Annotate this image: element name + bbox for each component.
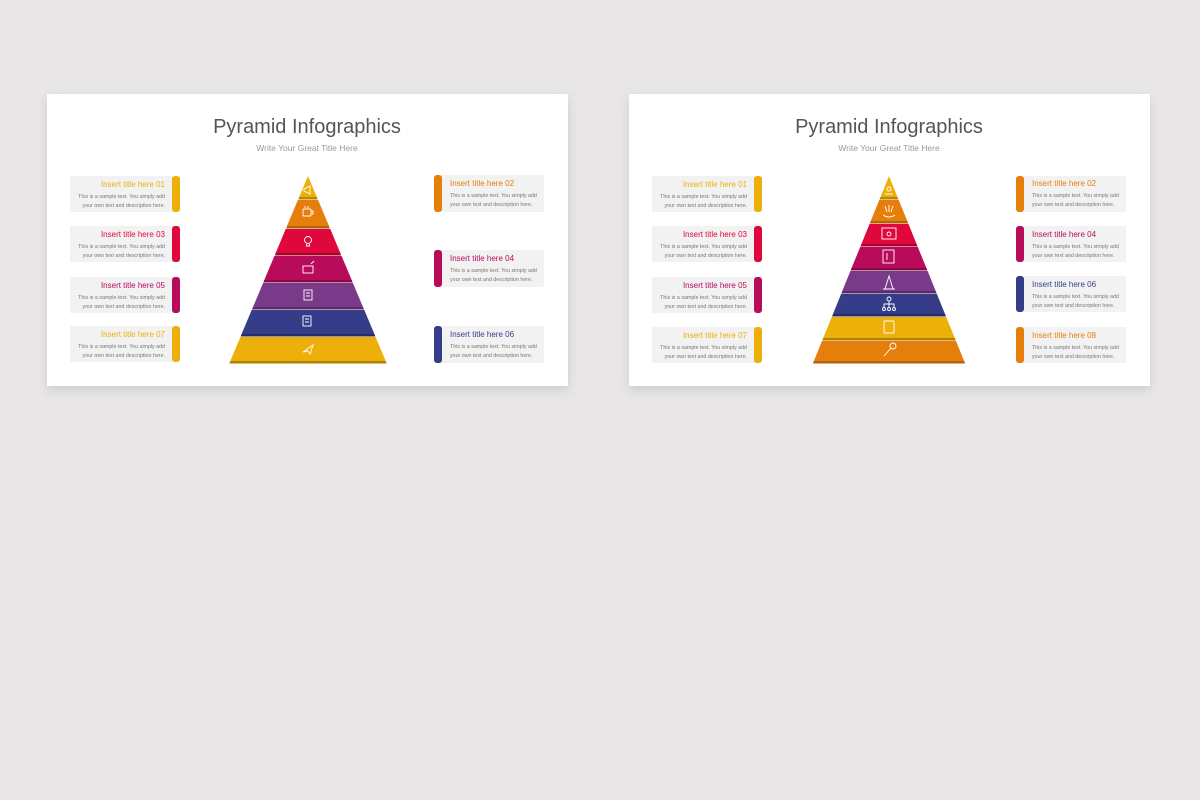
callout: 01: [70, 176, 180, 212]
callout: 05: Insert title here 05: [101, 281, 166, 290]
pyramid: 8 levels: [813, 176, 965, 364]
callout: 02: your own text and description here.: [450, 202, 532, 208]
callout: 03: your own text and description here.: [83, 253, 165, 259]
callout: 02: This is a sample text. You simply add: [1032, 193, 1119, 199]
callout: 01: This is a sample text. You simply add: [660, 194, 747, 200]
callout: 08: [1016, 327, 1126, 363]
callout: 04: [1016, 226, 1126, 262]
callout: 04: This is a sample text. You simply add: [450, 268, 537, 274]
callout: 07: your own text and description here.: [83, 353, 165, 359]
callout: 06: Insert title here 06: [1032, 280, 1097, 289]
callout: 06: Insert title here 06: [450, 330, 515, 339]
callout: 05: This is a sample text. You simply add: [78, 295, 165, 301]
callout: 01: [652, 176, 762, 212]
callout: 08: Insert title here 08: [1032, 331, 1097, 340]
callout: 05: your own text and description here.: [83, 304, 165, 310]
callout: 07: your own text and description here.: [665, 354, 747, 360]
callout: 05: [70, 277, 180, 313]
pyramid: 7 levels: [229, 176, 387, 364]
callout: 07: This is a sample text. You simply add: [660, 345, 747, 351]
callout: 03: [652, 226, 762, 262]
callout: 07: Insert title here 07: [683, 331, 748, 340]
callout: 05: This is a sample text. You simply add: [660, 295, 747, 301]
callout: 03: This is a sample text. You simply add: [78, 244, 165, 250]
callout: 08: This is a sample text. You simply add: [1032, 345, 1119, 351]
callout: 07: Insert title here 07: [101, 330, 166, 339]
callout: 01: Insert title here 01: [683, 180, 748, 189]
callout: 06: [434, 326, 544, 363]
callout: 02: Insert title here 02: [450, 179, 515, 188]
callout: 03: your own text and description here.: [665, 253, 747, 259]
callout: 03: This is a sample text. You simply add: [660, 244, 747, 250]
callout: 06: This is a sample text. You simply add: [1032, 294, 1119, 300]
callout: 07: This is a sample text. You simply add: [78, 344, 165, 350]
callout: 07: [70, 326, 180, 362]
panel: slide 1: [47, 94, 568, 386]
callout: 04: your own text and description here.: [1032, 253, 1114, 259]
callout: 06: your own text and description here.: [1032, 303, 1114, 309]
callout: 05: [652, 277, 762, 313]
title: Pyramid Infographics: [795, 116, 983, 138]
callout: 01: your own text and description here.: [665, 203, 747, 209]
callout: 08: your own text and description here.: [1032, 354, 1114, 360]
subtitle: Write Your Great Title Here: [838, 143, 940, 153]
callout: 04: [434, 250, 544, 287]
callout: 02: [434, 175, 544, 212]
callout: 06: This is a sample text. You simply add: [450, 344, 537, 350]
callout: 01: This is a sample text. You simply add: [78, 194, 165, 200]
callout: 06: [1016, 276, 1126, 312]
callout: 04: Insert title here 04: [1032, 230, 1097, 239]
subtitle: Write Your Great Title Here: [256, 143, 358, 153]
callout: 01: Insert title here 01: [101, 180, 166, 189]
callout: 05: Insert title here 05: [683, 281, 748, 290]
callout: 02: Insert title here 02: [1032, 179, 1097, 188]
callout: 03: [70, 226, 180, 262]
callout: 02: your own text and description here.: [1032, 202, 1114, 208]
callout: 03: Insert title here 03: [683, 230, 748, 239]
callout: 04: This is a sample text. You simply add: [1032, 244, 1119, 250]
callout: 05: your own text and description here.: [665, 304, 747, 310]
callout: 01: your own text and description here.: [83, 203, 165, 209]
title: Pyramid Infographics: [213, 116, 401, 138]
panel: slide 2: [629, 94, 1150, 386]
callout: 07: [652, 327, 762, 363]
callout: 04: Insert title here 04: [450, 254, 515, 263]
callout: 02: [1016, 176, 1126, 212]
callout: 02: This is a sample text. You simply add: [450, 193, 537, 199]
callout: 03: Insert title here 03: [101, 230, 166, 239]
callout: 06: your own text and description here.: [450, 353, 532, 359]
callout: 04: your own text and description here.: [450, 277, 532, 283]
